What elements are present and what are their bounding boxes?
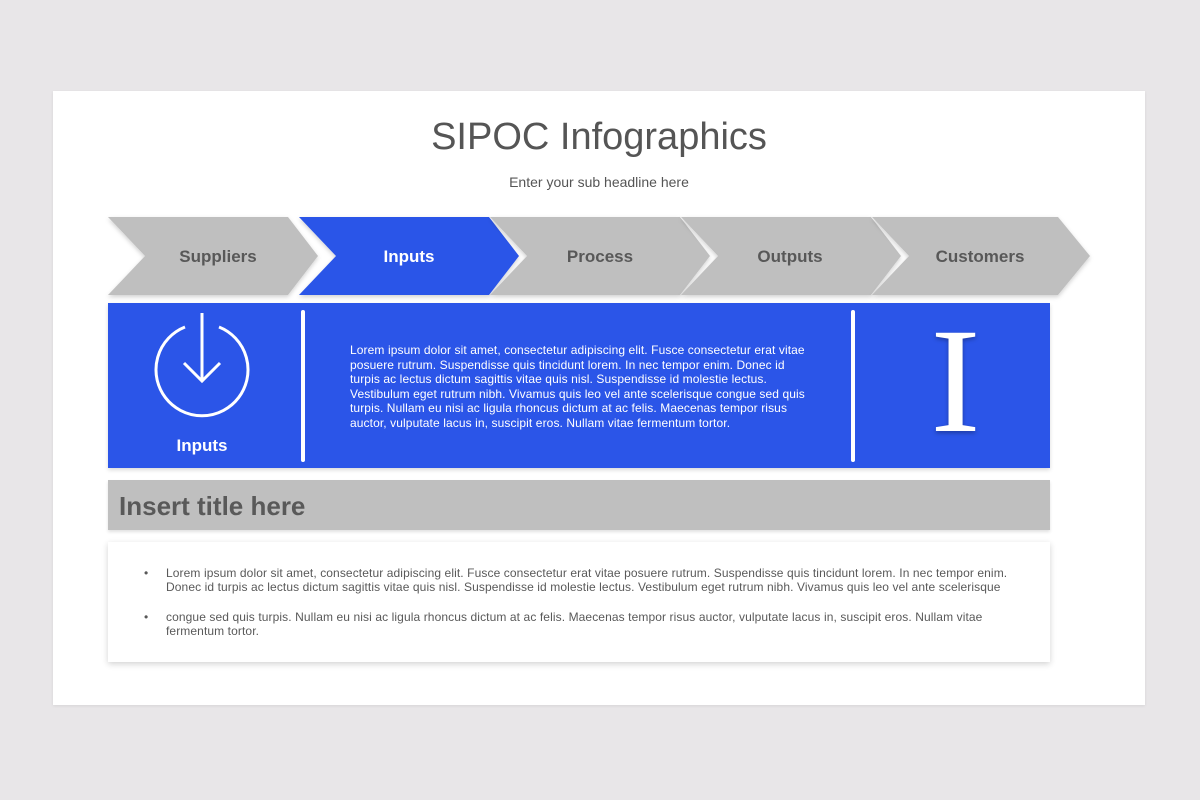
title: SIPOC Infographics [431,116,767,158]
label: Inputs: Inputs [176,436,228,455]
chevron: Outputs: Outputs [757,247,823,266]
bullet 1: Lorem ipsum dolor sit amet, consectetur adipiscing elit. Fusce consectetur erat vitae posuere rutrum. Suspendisse quis tincidunt lorem. In nec tempor enim. [166,566,1007,580]
chevron: Customers: Customers [936,247,1024,266]
chevron row [108,217,1090,299]
text card: • [144,610,148,624]
bullet 1 [144,566,1007,594]
panel: inputs detail [108,303,1050,468]
chevron: Suppliers [108,217,318,295]
heading bar: Insert title here [119,491,305,521]
icon: download circle [154,313,250,418]
panel: slide card [53,91,1145,705]
text block: auctor, vulputate lacus in, suscipit eros. Nullam vitae fermentum tortor. [350,416,730,430]
text card [108,542,1050,662]
chevron: Process: Process [567,247,633,266]
bullet 2 [144,610,982,638]
chevron: Inputs: Inputs [384,247,434,266]
text block [350,343,805,430]
text block: posuere rutrum. Suspendisse quis tincidunt lorem. In nec tempor enim. Donec id [350,358,785,372]
bullet 2: congue sed quis turpis. Nullam eu nisi ac ligula rhoncus dictum at ac felis. Maecenas tempor risus auctor, vulputate lacus in, suscipit eros. Nullam vitae [166,610,982,624]
text block: Lorem ipsum dolor sit amet, consectetur adipiscing elit. Fusce consectetur erat vitae [350,343,805,357]
bullet 1: Donec id turpis ac lectus dictum sagittis vitae quis nisl. Suspendisse id molestie lectus. Vestibulum eget rutrum nibh. Vivamus quis leo vel ante scelerisque [166,580,1001,594]
bullet 2: fermentum tortor. [166,624,259,638]
chevron: Suppliers: Suppliers [179,247,257,266]
chevron: Process [490,217,710,295]
subtitle: Enter your sub headline here [509,174,689,190]
heading bar [108,480,1050,530]
text card: • [144,566,148,580]
text block: turpis ac lectus dictum sagittis vitae quis nisl. Suspendisse id molestie lectus. [350,372,767,386]
divider left [301,310,305,462]
text block: turpis. Nullam eu nisi ac ligula rhoncus dictum at ac felis. Maecenas tempor risus [350,401,787,415]
chevron: Inputs [299,217,519,295]
divider right [851,310,855,462]
icon: letter I: I [931,298,980,464]
chevron: Customers [872,217,1090,295]
text block: Vestibulum eget rutrum nibh. Vivamus quis leo vel ante scelerisque congue sed quis [350,386,805,400]
chevron: Outputs [681,217,901,295]
